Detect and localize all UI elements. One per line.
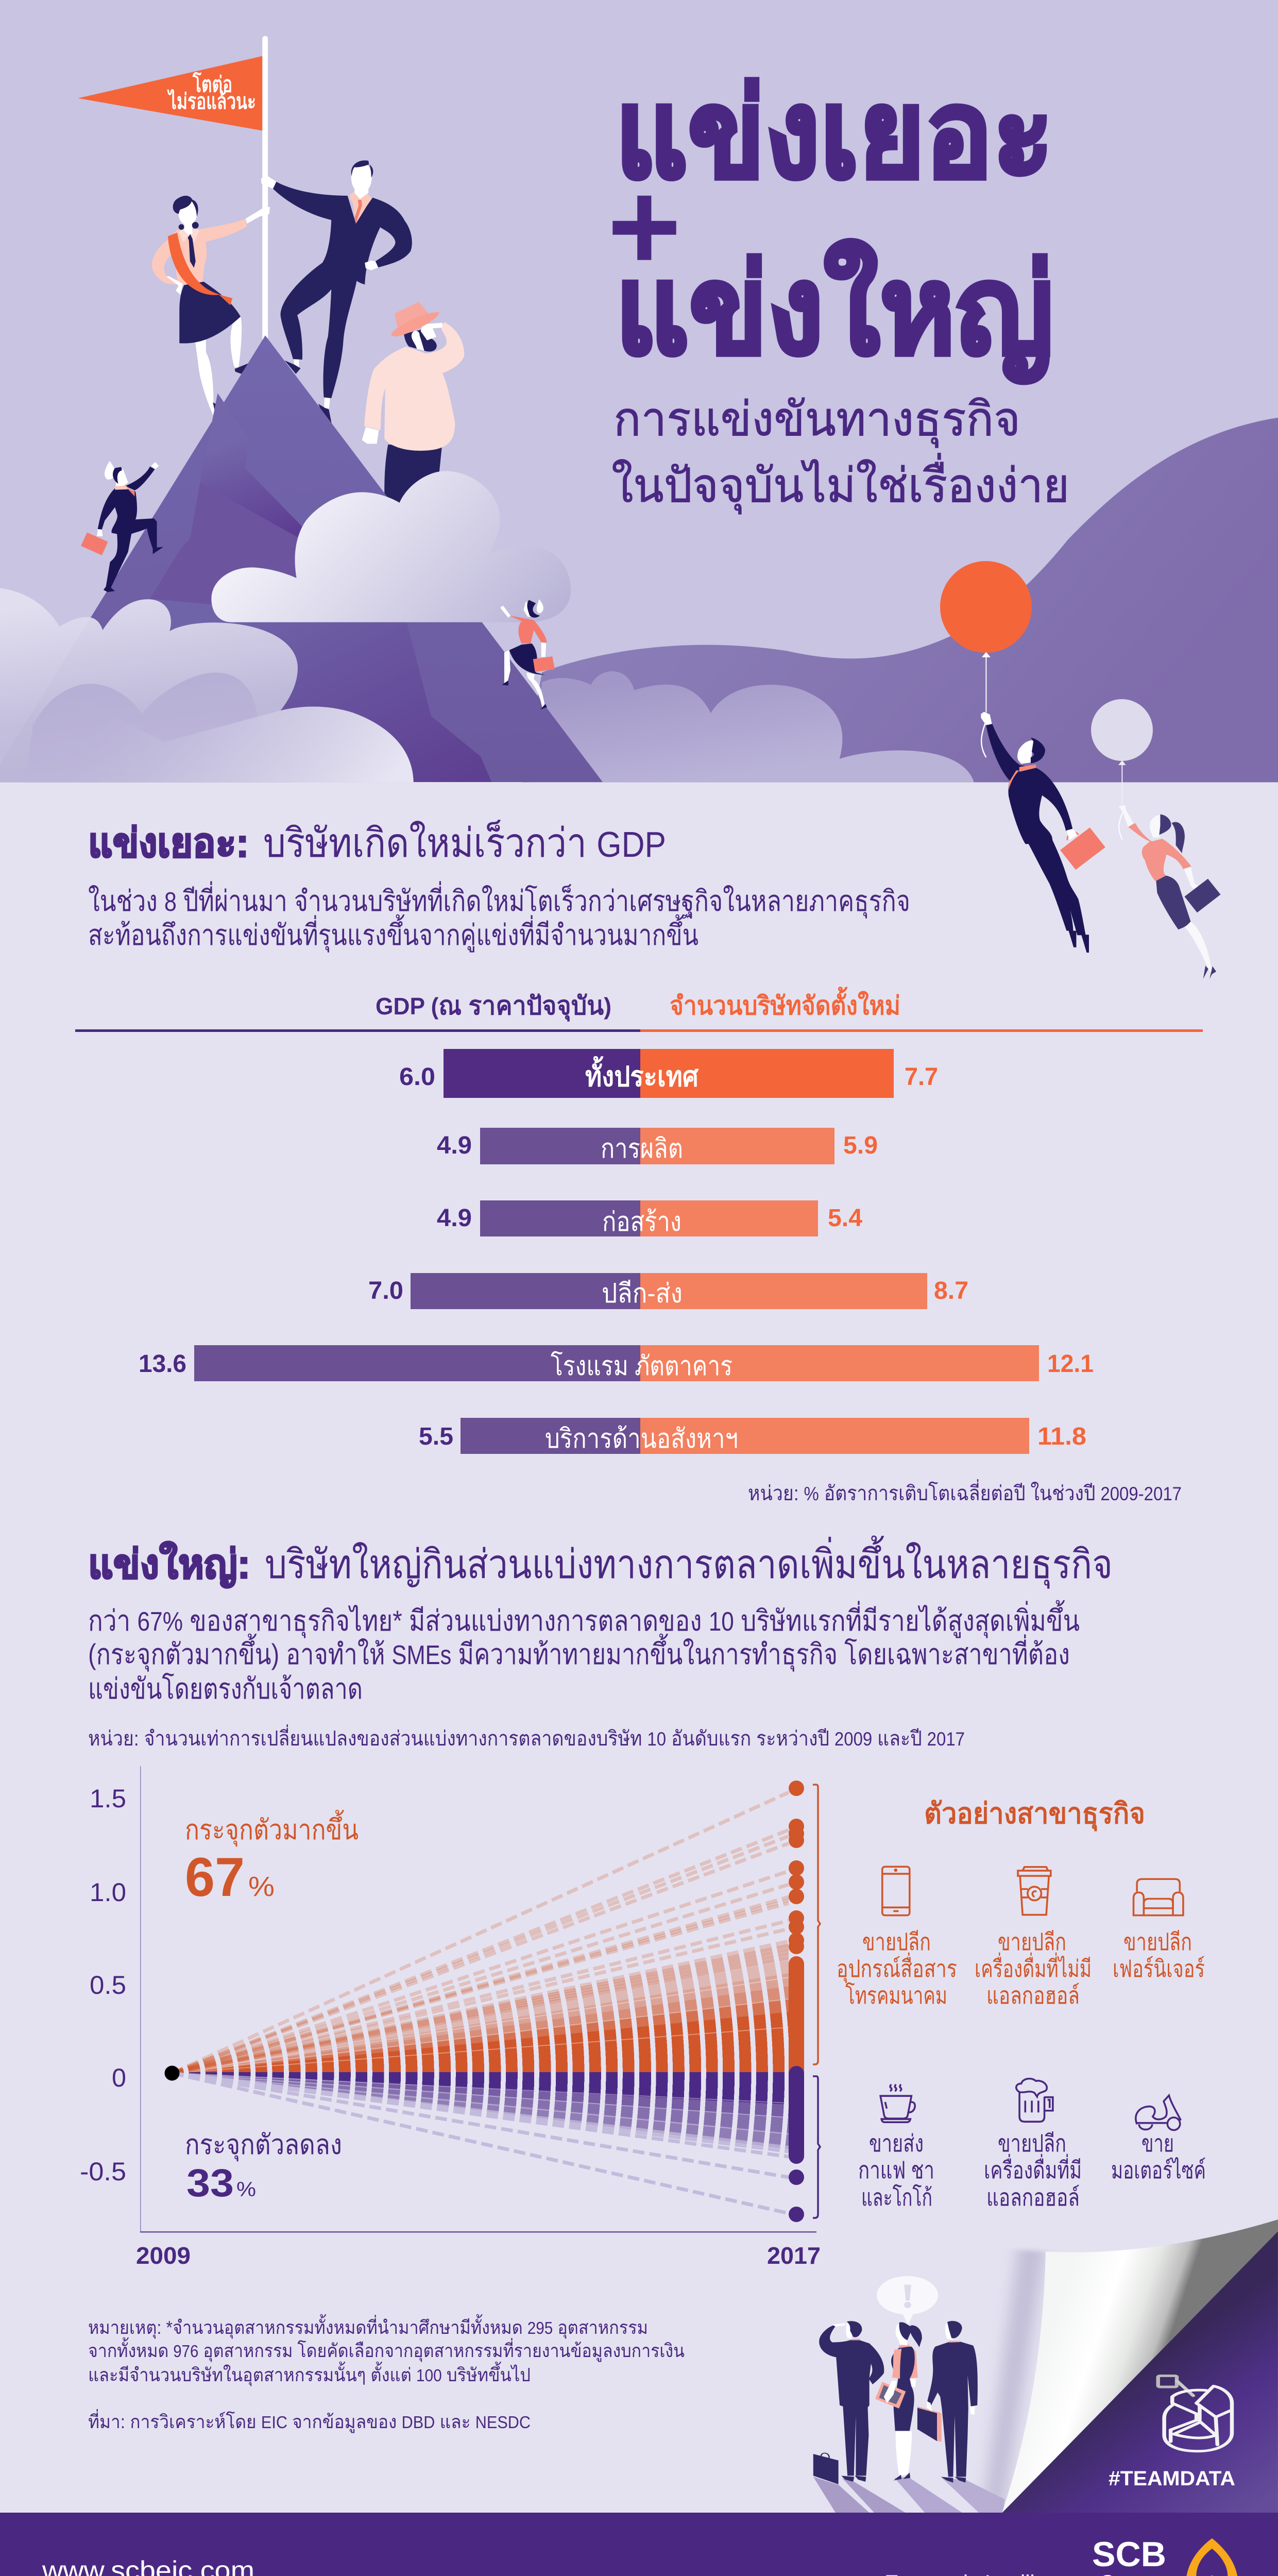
bar row: ปลีก-ส่ง: ปลีก-ส่ง <box>602 1279 683 1309</box>
flag pole and flag <box>78 36 268 343</box>
sector label: coffee tea cocoa wholesale: ขายส่ง <box>869 2130 924 2157</box>
bar row: การผลิต <box>437 1128 878 1164</box>
orange end dots 2017 <box>789 1781 804 2080</box>
fan highlight streaks <box>172 1977 789 2134</box>
sector label: non-alcoholic drinks: เครื่องดื่มที่ไม่มี <box>975 1952 1092 1982</box>
bar row: บริการด้านอสังหาฯ: 5.5 <box>419 1423 453 1450</box>
cloud: lower right <box>530 671 974 782</box>
figure: climbing man <box>81 461 163 592</box>
bar row: การผลิต: 4.9 <box>437 1132 472 1159</box>
orange balloon <box>940 561 1032 653</box>
bar chart: GDP vs new companies <box>139 1049 1094 1454</box>
sector label: non-alcoholic drinks: แอลกอฮอล์ <box>986 1982 1080 2009</box>
page peel: curled white flap <box>1002 2219 1278 2513</box>
x axis labels: 2009 <box>136 2242 191 2269</box>
bar row: บริการด้านอสังหาฯ: บริการด้านอสังหาฯ <box>545 1424 738 1454</box>
unit note: fan chart: หน่วย: จำนวนเท่าการเปลี่ยนแปลงของส่วนแบ่งทางการตลาดของบริษัท 10 อันดับแรก ระหว่างปี 2009 และปี 2017 <box>88 1724 965 1750</box>
fan chart: market share change <box>80 1766 821 2269</box>
cloud: big center <box>211 471 571 622</box>
y axis labels: 0.5 <box>90 1971 126 1999</box>
bar row: โรงแรม ภัตตาคาร: 12.1 <box>1047 1350 1094 1378</box>
y axis labels: 1.0 <box>90 1878 126 1907</box>
label: 67 percent: กระจุกตัวมากขึ้น <box>185 1810 359 1847</box>
icon: scooter <box>1136 2095 1181 2130</box>
cloud: bottom left <box>0 588 414 783</box>
section heading: แข่งเยอะ: บริษัทเกิดใหม่เร็วกว่า GDP <box>263 820 666 866</box>
label: 33 percent <box>185 2129 342 2205</box>
bar row: ทั้งประเทศ: ทั้งประเทศ <box>585 1056 699 1092</box>
page peel: purple corner <box>1002 2231 1278 2513</box>
concentric dash gaps <box>172 1937 791 2159</box>
text block: source: ที่มา: การวิเคราะห์โดย EIC จากข้อมูลของ DBD และ NESDC <box>88 2409 531 2433</box>
sector label: telecom devices <box>837 1928 957 2009</box>
label: 33 percent: 33 <box>186 2161 234 2205</box>
bar row: ปลีก-ส่ง <box>368 1273 968 1309</box>
bar row: บริการด้านอสังหาฯ: 11.8 <box>1037 1423 1086 1450</box>
bracket: concentrated less <box>813 2076 820 2218</box>
icon: smartphone <box>882 1867 910 1916</box>
text block: section 1 intro: ในช่วง 8 ปีที่ผ่านมา จำนวนบริษัทที่เกิดใหม่โตเร็วกว่าเศรษฐกิจในหลายภาคธุรกิจ <box>88 881 910 919</box>
axes <box>140 1766 816 2233</box>
unit note: bar chart: หน่วย: % อัตราการเติบโตเฉลี่ยต่อปี ในช่วงปี 2009-2017 <box>748 1479 1182 1505</box>
y axis labels <box>80 1784 126 2186</box>
bar row: ทั้งประเทศ <box>399 1049 938 1098</box>
bar row: ก่อสร้าง: 5.4 <box>828 1205 862 1232</box>
sector label: motorcycles <box>1111 2130 1206 2183</box>
hashtag label: #TEAMDATA <box>1109 2467 1235 2490</box>
sector label: furniture: ขายปลีก <box>1123 1928 1192 1955</box>
text block: footnote: และมีจำนวนบริษัทในอุตสาหกรรมนั้นๆ ตั้งแต่ 100 บริษัทขึ้นไป <box>88 2361 531 2386</box>
section heading: แข่งเยอะ: แข่งเยอะ: <box>88 820 249 866</box>
text block: section 2 intro: กว่า 67% ของสาขาธุรกิจไทย* มีส่วนแบ่งทางการตลาดของ 10 บริษัทแรกที่มีรายได้สูงสุดเพิ่มขึ้น <box>88 1600 1080 1638</box>
bar row: โรงแรม ภัตตาคาร <box>139 1345 1094 1381</box>
mountain <box>0 335 603 782</box>
man left <box>819 2321 884 2482</box>
orange fan band <box>172 1943 789 2073</box>
panel: hero illustration <box>0 0 1278 783</box>
text block: footnote: จากทั้งหมด 976 อุตสาหกรรม โดยคัดเลือกจากอุตสาหกรรมที่รายงานข้อมูลงบการเงิน <box>88 2337 685 2362</box>
icon: sofa <box>1134 1879 1183 1916</box>
purple end dots 2017 <box>789 2066 804 2222</box>
icon: coffee cup <box>1018 1867 1051 1915</box>
page peel shadow <box>982 2249 1046 2513</box>
sector label: coffee tea cocoa wholesale <box>858 2130 934 2211</box>
floor shadows <box>813 2477 1004 2513</box>
text block: section 1 intro <box>88 881 910 953</box>
sector label: alcoholic drinks: ขายปลีก <box>998 2130 1066 2157</box>
text block: footnote: หมายเหตุ: *จำนวนอุตสาหกรรมทั้งหมดที่นำมาศึกษามีทั้งหมด 295 อุตสาหกรรม <box>88 2314 648 2339</box>
icon: beer mug <box>1016 2079 1053 2122</box>
footer band <box>0 2513 1278 2576</box>
chart legend headers: GDP (ณ ราคาปัจจุบัน) <box>376 991 611 1022</box>
logo: lotus bud <box>1186 2538 1238 2576</box>
section heading: แข่งใหญ่: แข่งใหญ่: <box>88 1541 250 1588</box>
bar row: ปลีก-ส่ง: 8.7 <box>934 1277 968 1304</box>
sector label: non-alcoholic drinks <box>975 1928 1092 2009</box>
orange dashed lines <box>172 1792 789 2073</box>
sector label: coffee tea cocoa wholesale: และโกโก้ <box>861 2184 932 2211</box>
x axis labels: 2017 <box>767 2242 821 2269</box>
sector label: telecom devices: อุปกรณ์สื่อสาร <box>837 1952 957 1984</box>
bar row: ทั้งประเทศ: 7.7 <box>905 1063 938 1091</box>
text block: section 2 intro: (กระจุกตัวมากขึ้น) อาจทำให้ SMEs มีความท้าทายมากขึ้นในการทำธุรกิจ โดยเฉพาะสาขาที่ต้อง <box>88 1634 1070 1672</box>
figure: balloon man <box>981 653 1105 953</box>
x axis labels <box>136 2242 821 2269</box>
main title line 1: แข่งเยอะ <box>615 65 1053 203</box>
text block: section 2 intro: แข่งขันโดยตรงกับเจ้าตลาด <box>88 1672 363 1705</box>
hill background <box>522 418 1278 782</box>
text block: section 1 intro: สะท้อนถึงการแข่งขันที่รุนแรงขึ้นจากคู่แข่งที่มีจำนวนมากขึ้น <box>88 914 698 953</box>
briefcase on floor <box>813 2453 839 2484</box>
bar row: โรงแรม ภัตตาคาร: 13.6 <box>139 1350 186 1378</box>
sector label: alcoholic drinks <box>984 2130 1082 2211</box>
origin dot 2009 <box>165 2066 179 2080</box>
subtitle line 2: ในปัจจุบันไม่ใช่เรื่องง่าย <box>611 453 1069 515</box>
figure: man at the pole <box>261 160 412 423</box>
plus sign: + <box>607 156 681 297</box>
label: 67 percent <box>185 1810 359 1908</box>
sector label: telecom devices: ขายปลีก <box>862 1928 931 1955</box>
man right <box>927 2321 978 2483</box>
woman centre <box>875 2322 922 2481</box>
white balloon <box>1091 699 1153 761</box>
figure: man with pink hat <box>362 302 464 506</box>
chart legend headers <box>75 987 1203 1032</box>
bar row: ก่อสร้าง <box>437 1200 862 1237</box>
speech bubble with exclamation mark <box>877 2276 938 2325</box>
y axis labels: 1.5 <box>90 1784 126 1813</box>
section heading: แข่งใหญ่ <box>88 1535 1113 1589</box>
sector label: coffee tea cocoa wholesale: กาแฟ ชา <box>858 2157 934 2183</box>
y axis labels: 0 <box>112 2063 126 2092</box>
bar row: โรงแรม ภัตตาคาร: โรงแรม ภัตตาคาร <box>551 1351 732 1381</box>
section heading: แข่งเยอะ <box>88 820 666 866</box>
purple fan band <box>172 2072 789 2149</box>
sector label: furniture <box>1113 1928 1205 1982</box>
sector label: non-alcoholic drinks: ขายปลีก <box>998 1928 1066 1955</box>
icon: data pie cylinder <box>1158 2376 1232 2451</box>
label: 33 percent: % <box>236 2178 256 2201</box>
brand name: SCB <box>1092 2535 1166 2574</box>
heading: sector examples: ตัวอย่างสาขาธุรกิจ <box>924 1797 1145 1832</box>
bar row: การผลิต: 5.9 <box>843 1132 878 1159</box>
figure: climbing woman <box>500 599 555 709</box>
label: 33 percent: กระจุกตัวลดลง <box>185 2129 342 2162</box>
bracket: concentrated more <box>813 1785 820 2064</box>
bar row: บริการด้านอสังหาฯ <box>419 1418 1086 1454</box>
main title line 2: แข่งใหญ่ <box>615 240 1053 383</box>
briefcase in hand <box>917 2406 942 2442</box>
figures: standing team with shadows <box>813 2276 1004 2513</box>
sector label: furniture: เฟอร์นิเจอร์ <box>1113 1955 1205 1982</box>
sector label: alcoholic drinks: แอลกอฮอล์ <box>986 2184 1080 2211</box>
section heading: แข่งใหญ่: บริษัทใหญ่กินส่วนแบ่งทางการตลาดเพิ่มขึ้นในหลายธุรกิจ <box>265 1535 1113 1589</box>
sector label: motorcycles: ขาย <box>1141 2130 1174 2157</box>
chart legend headers: จำนวนบริษัทจัดตั้งใหม่ <box>670 987 900 1020</box>
bar row: ก่อสร้าง: 4.9 <box>437 1205 472 1232</box>
bar row: ก่อสร้าง: ก่อสร้าง <box>602 1207 681 1237</box>
purple dashed lines <box>172 2073 789 2213</box>
text block: footnote <box>88 2314 685 2386</box>
subtitle line 1: การแข่งขันทางธุรกิจ <box>614 393 1020 448</box>
icon: tea cup <box>880 2084 915 2122</box>
text block: section 2 intro <box>88 1600 1080 1705</box>
sector label: telecom devices: โทรคมนาคม <box>845 1982 947 2009</box>
figure: woman at the pole <box>152 196 270 418</box>
bar row: การผลิต: การผลิต <box>601 1134 683 1164</box>
sector label: motorcycles: มอเตอร์ไซค์ <box>1111 2157 1206 2183</box>
flag text 2: ไม่รอแล้วนะ <box>167 89 256 113</box>
y axis labels: -0.5 <box>80 2157 126 2186</box>
label: 67 percent: 67 <box>185 1846 245 1908</box>
bar row: ปลีก-ส่ง: 7.0 <box>368 1277 403 1304</box>
figure: balloon woman <box>1119 761 1220 979</box>
label: 67 percent: % <box>248 1871 275 1902</box>
bar row: ทั้งประเทศ: 6.0 <box>399 1063 435 1091</box>
flag text 1: โตต่อ <box>192 72 232 96</box>
sector label: alcoholic drinks: เครื่องดื่มที่มี <box>984 2154 1082 2183</box>
